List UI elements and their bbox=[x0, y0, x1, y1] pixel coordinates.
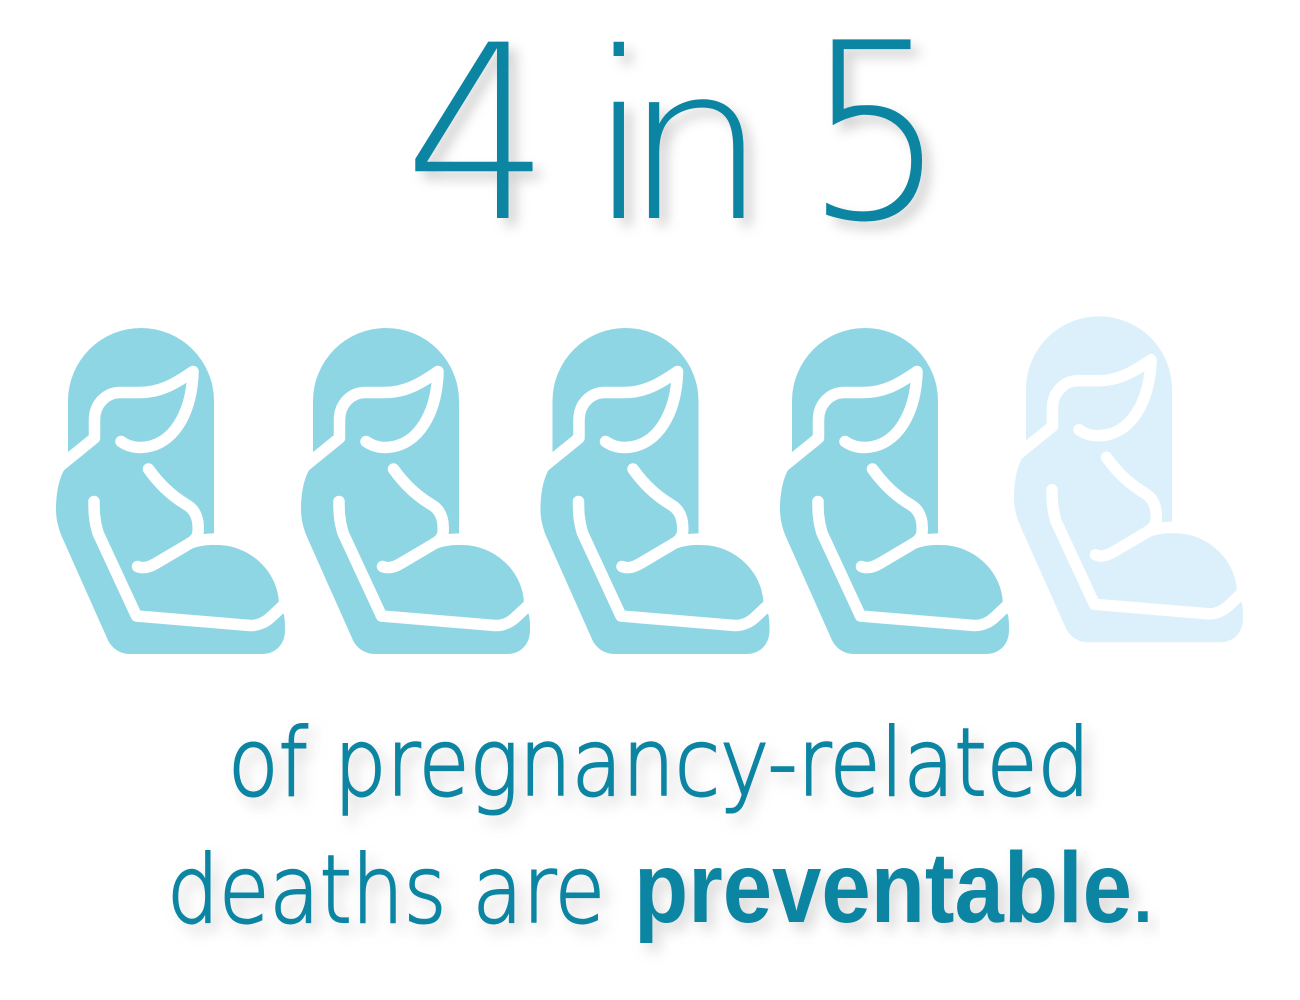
icon: pregnant woman 3 bbox=[540, 328, 772, 654]
caption line 2 bold: preventable: preventable bbox=[634, 832, 1132, 944]
icon: pregnant woman 2 bbox=[301, 328, 533, 654]
icon row: five pregnant women bbox=[56, 316, 1246, 654]
caption line 2 regular: deaths are bbox=[167, 836, 605, 945]
title: 4 in 5: n bbox=[623, 22, 768, 269]
title: 4 in 5: 4 bbox=[404, 0, 551, 275]
icon: pregnant woman 4 bbox=[780, 328, 1012, 654]
caption: of pregnancy-related deaths are preventable. bbox=[167, 709, 1157, 945]
title: 4 in 5: 5 bbox=[804, 0, 947, 276]
icon: pregnant woman 1 bbox=[56, 328, 288, 654]
caption line 1: of pregnancy-related bbox=[228, 709, 1090, 818]
title: 4 in 5: i bbox=[588, 3, 652, 273]
icon: pregnant woman 5 (faded) bbox=[1014, 316, 1246, 642]
caption period: . bbox=[1129, 832, 1157, 944]
title: 4 in 5 bbox=[415, 39, 936, 234]
